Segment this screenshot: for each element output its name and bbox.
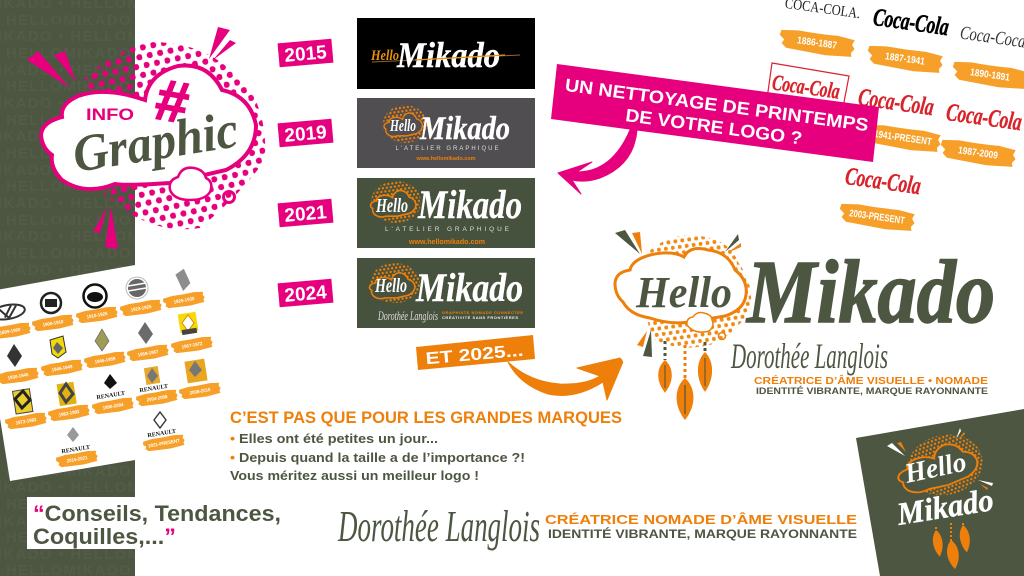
ring xyxy=(718,332,726,340)
Renault year brush labels: 2004-2008 xyxy=(146,394,168,403)
Renault year brush labels xyxy=(0,290,222,469)
year label 2019 xyxy=(278,119,333,147)
Renault year brush labels: 1900-1910 xyxy=(42,319,64,328)
banner: nettoyage de printemps: DE VOTRE LOGO ? xyxy=(624,105,803,149)
year label 2019: 2019 xyxy=(284,122,328,147)
logo panel 2019: Hello xyxy=(389,116,416,135)
halftone dots xyxy=(902,428,988,502)
Renault year brush labels: 1972-1982 xyxy=(15,417,37,426)
panel: olive left column with watermark: IKADO • HELLOMIKADO xyxy=(0,513,196,530)
year label 2015: 2015 xyxy=(284,42,328,67)
callout: conseils quote: “Conseils, Tendances, xyxy=(33,501,281,526)
Renault year brush labels: 1982-1992 xyxy=(58,409,80,418)
logo panel 2021: Hello xyxy=(375,195,408,217)
Renault year brush labels: 1923-1925 xyxy=(130,304,152,313)
Renault logo row 2 xyxy=(7,312,198,367)
logo panel 2021: L'ATELIER GRAPHIQUE xyxy=(385,226,510,233)
callout: conseils quote xyxy=(27,497,285,549)
Graphic: Graphic xyxy=(69,102,242,184)
Hello: Hello xyxy=(901,447,969,490)
Renault year brush labels: 1959-1967 xyxy=(137,349,159,358)
INFO: INFO xyxy=(86,105,134,124)
panel: olive left column with watermark: IKADO • HELLOMIKADO xyxy=(0,28,196,45)
Coca-Cola year brush labels: 2003-PRESENT xyxy=(848,208,905,227)
panel: olive left column with watermark: HELLOMIKADO xyxy=(6,529,132,546)
year label 2024 xyxy=(278,279,333,307)
signature: Dorothée Langlois xyxy=(730,336,888,376)
Coca-Cola year brush labels: 1987-2009 xyxy=(957,145,999,162)
Coca-Cola logos: Coca-Cola xyxy=(771,69,841,104)
ring xyxy=(224,192,234,202)
logo panel 2019: www.hellomikado.com xyxy=(415,156,476,162)
panel: Renault logo history card xyxy=(0,240,300,481)
small cloud xyxy=(170,168,211,200)
Coca-Cola year brush labels: 1886-1887 xyxy=(796,35,838,52)
panel: olive left column with watermark: IKADO • HELLOMIKADO xyxy=(0,546,196,563)
logo panel 2021 xyxy=(357,178,535,248)
Coca-Cola year brush labels: 1887-1941 xyxy=(884,51,926,68)
Renault year brush labels: 1967-1972 xyxy=(181,341,203,350)
logo panel 2024: Dorothée Langlois xyxy=(377,308,438,323)
logo panel 2024: Hello xyxy=(374,275,407,297)
Renault year brush labels: 1990-2004 xyxy=(102,402,124,411)
Renault year brush labels: 2021-PRESENT xyxy=(148,438,180,449)
halftone dots xyxy=(645,235,751,348)
panel: olive left column with watermark: HELLOMIKADO xyxy=(6,45,132,62)
label: et 2025: ET 2025... xyxy=(425,341,524,368)
year label 2015 xyxy=(278,39,333,67)
cloud xyxy=(41,66,256,189)
Renault logo row 4: RENAULT xyxy=(147,429,177,439)
panel: olive left column with watermark: IKADO • HELLOMIKADO xyxy=(0,162,196,179)
text block: pas que pour les grandes marques xyxy=(230,409,622,483)
panel: olive left column with watermark: HELLOMIKADO xyxy=(6,145,132,162)
cloud xyxy=(615,249,746,323)
spikes xyxy=(615,230,741,357)
panel: olive left column with watermark: IKADO • HELLOMIKADO xyxy=(0,95,196,112)
logo panel 2019 xyxy=(357,98,535,168)
Renault year brush labels: 1910-1925 xyxy=(86,311,108,320)
logo panel 2019: Mikado xyxy=(419,111,510,147)
panel: olive left column with watermark: IKADO • HELLOMIKADO xyxy=(0,479,196,496)
main logo: Hello Mikado xyxy=(615,230,995,420)
small cloud xyxy=(687,312,713,332)
Mikado: Mikado xyxy=(894,481,996,532)
signature block: Dorothée Langlois xyxy=(337,502,857,551)
year label 2024: 2024 xyxy=(284,282,328,307)
panel: bottom right logo card xyxy=(856,409,1024,576)
panel: Coca-Cola logo history xyxy=(766,0,1024,233)
logo panel 2021: Mikado xyxy=(417,182,522,227)
logo panel 2015: Hello xyxy=(370,48,399,64)
logo panel 2015: Mikado xyxy=(396,35,500,75)
label: et 2025 xyxy=(416,335,535,370)
Renault year brush labels: 1946-1959 xyxy=(94,356,116,365)
panel: olive left column with watermark: HELLOMIKADO xyxy=(6,496,132,513)
feathers xyxy=(658,352,712,420)
Coca-Cola year brush labels: 1941-PRESENT xyxy=(873,129,932,148)
logo panel 2024: CRÉATIVITÉ SANS FRONTIÈRES xyxy=(442,315,518,320)
dream catcher strings xyxy=(665,341,705,378)
logo panel 2015 xyxy=(357,18,535,89)
sub tagline: IDENTITÉ VIBRANTE, MARQUE RAYONNANTE xyxy=(756,386,988,397)
panel: olive left column with watermark: IKADO • HELLOMIKADO xyxy=(0,228,196,245)
logo panel 2024 xyxy=(357,258,535,328)
Coca-Cola logos: Coca-Cola xyxy=(857,84,936,121)
banner: nettoyage de printemps: UN NETTOYAGE DE PRINTEMPS xyxy=(564,75,870,135)
logo panel 2021: www.hellomikado.com xyxy=(408,237,485,246)
Renault logo row 3 xyxy=(13,359,208,414)
Renault year brush labels: 2015-2021 xyxy=(66,455,88,464)
arrow: pink curved arrow from banner xyxy=(558,130,637,194)
text block: pas que pour les grandes marques: • Elles ont été petites un jour... xyxy=(230,431,438,446)
Renault year brush labels: 2008-2015 xyxy=(189,387,211,396)
panel: olive left column with watermark: IKADO • HELLOMIKADO xyxy=(0,62,196,79)
logo panel 2024: Mikado xyxy=(415,265,523,310)
signature block: Dorothée Langlois: CRÉATRICE NOMADE D’ÂME VISUELLE xyxy=(545,512,857,527)
callout: conseils quote: Coquilles,... ” xyxy=(33,524,176,549)
panel: olive left column with watermark xyxy=(0,0,135,576)
panel: olive left column with watermark: HELLOMIKADO xyxy=(6,212,132,229)
text block: pas que pour les grandes marques: C’EST PAS QUE POUR LES GRANDES MARQUES xyxy=(230,409,622,427)
Coca-Cola year brush labels: 1890-1891 xyxy=(969,67,1011,84)
Renault year brush labels: 1945-1949 xyxy=(51,364,73,373)
feathers xyxy=(931,523,972,570)
panel: olive left column with watermark: IKADO • HELLOMIKADO xyxy=(0,128,196,145)
signature block: Dorothée Langlois: Dorothée Langlois xyxy=(337,502,540,551)
Renault logo row 4 xyxy=(61,412,177,455)
text block: pas que pour les grandes marques: Vous méritez aussi un meilleur logo ! xyxy=(230,468,479,483)
Coca-Cola logos xyxy=(766,0,1024,200)
Coca-Cola logos: Coca-Cola xyxy=(844,163,923,200)
text block: pas que pour les grandes marques: • Depuis quand la taille a de l’importance ?! xyxy=(230,450,525,465)
year label 2021: 2021 xyxy=(284,202,328,227)
Renault year brush labels: 1925-1930 xyxy=(173,296,195,305)
cloud xyxy=(893,439,981,496)
panel: olive left column with watermark: HELLOMIKADO xyxy=(6,78,132,95)
signature block: Dorothée Langlois: IDENTITÉ VIBRANTE, MARQUE RAYONNANTE xyxy=(548,528,857,541)
Mikado: Mikado xyxy=(745,243,995,342)
Hello: Hello xyxy=(635,268,732,317)
logo panel 2019: L'ATELIER GRAPHIQUE xyxy=(396,146,498,152)
Renault year brush labels: 1930-1945 xyxy=(7,372,29,381)
tagline: CRÉATRICE D’ÂME VISUELLE • NOMADE xyxy=(754,374,988,387)
panel: olive left column with watermark: HELLOMIKADO xyxy=(6,12,132,29)
panel: olive left column with watermark: HELLOMIKADO xyxy=(6,112,132,129)
panel: olive left column with watermark: IKADO • HELLOMIKADO xyxy=(0,262,196,279)
year label 2021 xyxy=(278,199,333,227)
banner: nettoyage de printemps xyxy=(551,64,879,162)
hash: # xyxy=(151,67,194,136)
panel: olive left column with watermark: HELLOMIKADO xyxy=(6,463,132,480)
panel: olive left column with watermark: HELLOMIKADO xyxy=(6,178,132,195)
halftone dots xyxy=(85,42,265,229)
icon: Info Graphic cloud badge xyxy=(27,27,265,249)
panel: olive left column with watermark: HELLOMIKADO xyxy=(6,245,132,262)
spikes xyxy=(887,428,993,490)
spikes xyxy=(27,27,236,249)
Renault logo row 3: RENAULT xyxy=(139,384,169,394)
Renault logo row 1 xyxy=(0,268,191,322)
Coca-Cola year brush labels xyxy=(778,28,1024,233)
panel: olive left column with watermark: IKADO • HELLOMIKADO xyxy=(0,195,196,212)
arrow: orange curved arrow from et 2025 xyxy=(508,358,623,400)
logo panel 2024: GRAPHISTE NOMADE CONNECTÉE xyxy=(442,310,523,315)
Coca-Cola logos: Coca-Cola xyxy=(872,4,951,41)
Renault logo row 3: RENAULT xyxy=(96,391,126,401)
Renault logo row 4: RENAULT xyxy=(61,445,91,455)
